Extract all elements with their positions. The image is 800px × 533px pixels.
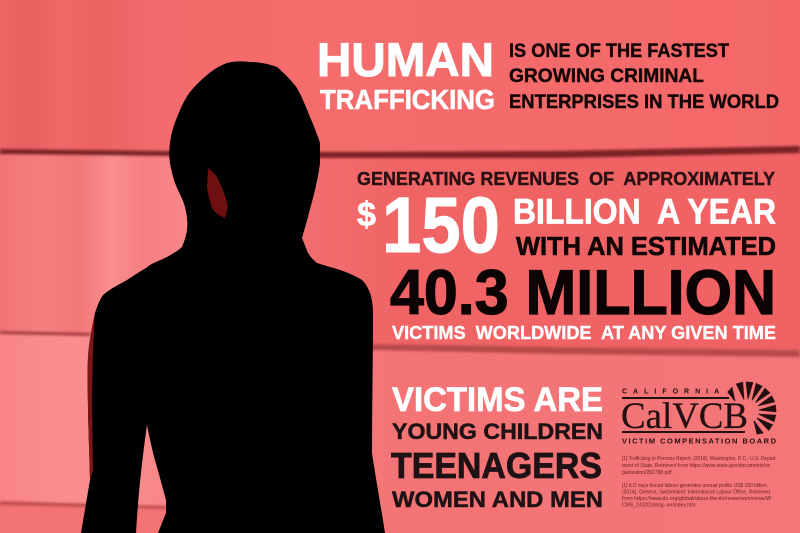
- revenue intro: GENERATING REVENUES OF APPROXIMATELY: [357, 168, 776, 189]
- who victims are: TEENAGERS: [391, 445, 602, 486]
- estimated line: WITH AN ESTIMATED: [516, 231, 776, 261]
- HUMAN TRAFFICKING title: TRAFFICKING: [320, 84, 495, 115]
- headline block: [317, 33, 779, 115]
- HUMAN TRAFFICKING title: HUMAN: [317, 33, 494, 86]
- source footnotes: ganization/282798.pdf.: [622, 470, 673, 476]
- source footnotes: [1] ILO says forced labour generates annual profits US$ 150 billion.: [622, 483, 768, 489]
- source footnotes: (2014). Geneva, Switzerland: International Labour Office. Retrieved: [622, 490, 770, 496]
- source footnotes: ment of State. Retrieved from https://www.state.gov/documents/or-: [622, 463, 771, 469]
- headline continuation: [509, 40, 779, 113]
- source footnotes: [1] Trafficking in Persons Report. (2018). Washington, D.C.: U.S. Depart-: [622, 456, 777, 462]
- CalVCB logo: VICTIM COMPENSATION BOARD: [622, 436, 777, 446]
- source footnotes: [622, 456, 777, 508]
- silhouette of a woman: [81, 61, 385, 533]
- hair highlight: [207, 168, 228, 218]
- logo text: CALIFORNIA: [622, 388, 725, 396]
- victims caption: VICTIMS WORLDWIDE AT ANY GIVEN TIME: [392, 322, 776, 343]
- CalVCB logo: CalVCB: [621, 396, 748, 437]
- revenue figure: 150: [382, 180, 500, 269]
- victims figure: 40.3 MILLION: [390, 258, 776, 328]
- revenue figure: [357, 180, 776, 269]
- who victims are: YOUNG CHILDREN: [392, 419, 603, 444]
- CalVCB logo: [621, 382, 777, 446]
- who victims are: VICTIMS ARE: [392, 381, 603, 419]
- headline continuation: GROWING CRIMINAL: [509, 65, 704, 87]
- who victims are: WOMEN AND MEN: [392, 487, 603, 512]
- headline continuation: ENTERPRISES IN THE WORLD: [509, 91, 779, 113]
- arm rim light: [88, 313, 95, 480]
- revenue figure: BILLION A YEAR: [513, 192, 776, 232]
- headline continuation: IS ONE OF THE FASTEST: [509, 40, 729, 62]
- logo sunburst: [728, 382, 776, 434]
- statistics block: [357, 168, 776, 343]
- HUMAN TRAFFICKING title: [317, 33, 495, 115]
- revenue figure: $: [357, 196, 376, 234]
- source footnotes: CMS_243201/lang--en/index.htm.: [622, 502, 697, 508]
- source footnotes: from https://www.ilo.org/global/about-the-ilo/newsroom/news/W: [622, 496, 772, 502]
- who victims are: [391, 381, 603, 512]
